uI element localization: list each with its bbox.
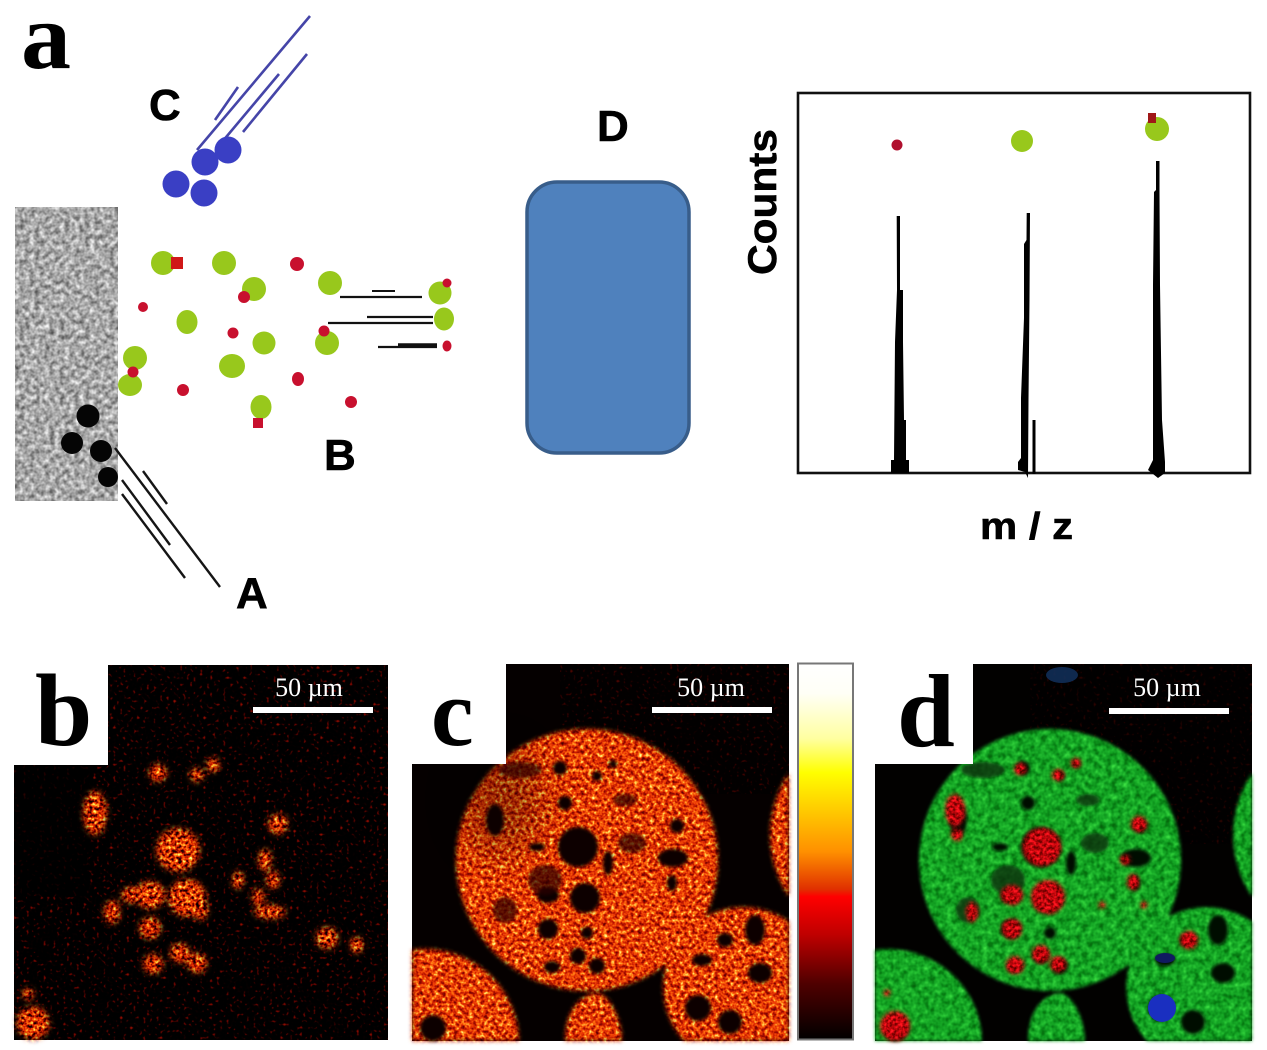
scale bar d <box>1109 673 1229 714</box>
scale bar b <box>253 673 373 713</box>
primary ion beam A: black particles <box>61 404 118 487</box>
label notch b: b <box>35 654 92 768</box>
label notch d <box>860 640 973 769</box>
blue domains <box>1046 667 1176 1022</box>
dim background haze <box>560 664 789 794</box>
analysis beam C: blue particles and lines <box>162 16 310 206</box>
sample surface texture <box>15 207 118 501</box>
label B: B <box>324 431 356 480</box>
panel c: ion image with spheres <box>398 640 789 1041</box>
scale bar d: 50 µm <box>1133 673 1201 702</box>
label notch c: c <box>431 659 474 766</box>
primary beam lines <box>115 448 220 587</box>
spheres <box>412 729 789 1041</box>
peak marker: combined particle <box>1145 113 1169 141</box>
bright domains <box>16 758 364 1040</box>
shaded side of the main sphere <box>460 745 540 855</box>
label notch d: d <box>897 654 955 769</box>
mass spectrum chart <box>741 93 1250 548</box>
secondary ion trajectory lines <box>328 291 437 347</box>
peak 1 <box>891 216 909 473</box>
plume of secondary particles B <box>118 251 454 428</box>
label D: D <box>597 102 629 151</box>
dark pores <box>883 760 1235 1041</box>
chart frame <box>798 93 1250 473</box>
colour scale bar <box>798 664 853 1040</box>
panel a: schematic <box>15 0 1250 618</box>
y axis label: Counts <box>741 129 785 275</box>
peak 2 <box>1018 213 1036 478</box>
green spheres <box>875 729 1252 1041</box>
label A: A <box>236 569 268 618</box>
peak marker: red particle <box>892 140 902 150</box>
label C: C <box>149 81 181 130</box>
panel d: overlay image <box>860 640 1252 1041</box>
panel b: ion image <box>0 640 388 1040</box>
background speckle <box>14 665 388 1040</box>
pores <box>420 760 772 1041</box>
label notch c <box>398 640 506 766</box>
peak marker: green particle <box>1011 130 1033 152</box>
faint background speckle <box>1030 664 1252 844</box>
scale bar c <box>652 673 772 713</box>
red domains <box>880 758 1198 1041</box>
analyser box D <box>527 182 689 453</box>
scale bar b: 50 µm <box>275 673 343 702</box>
scale bar c: 50 µm <box>677 673 745 702</box>
peak 3 <box>1148 161 1165 478</box>
label notch b <box>0 640 108 768</box>
x axis label: m / z <box>980 506 1073 548</box>
